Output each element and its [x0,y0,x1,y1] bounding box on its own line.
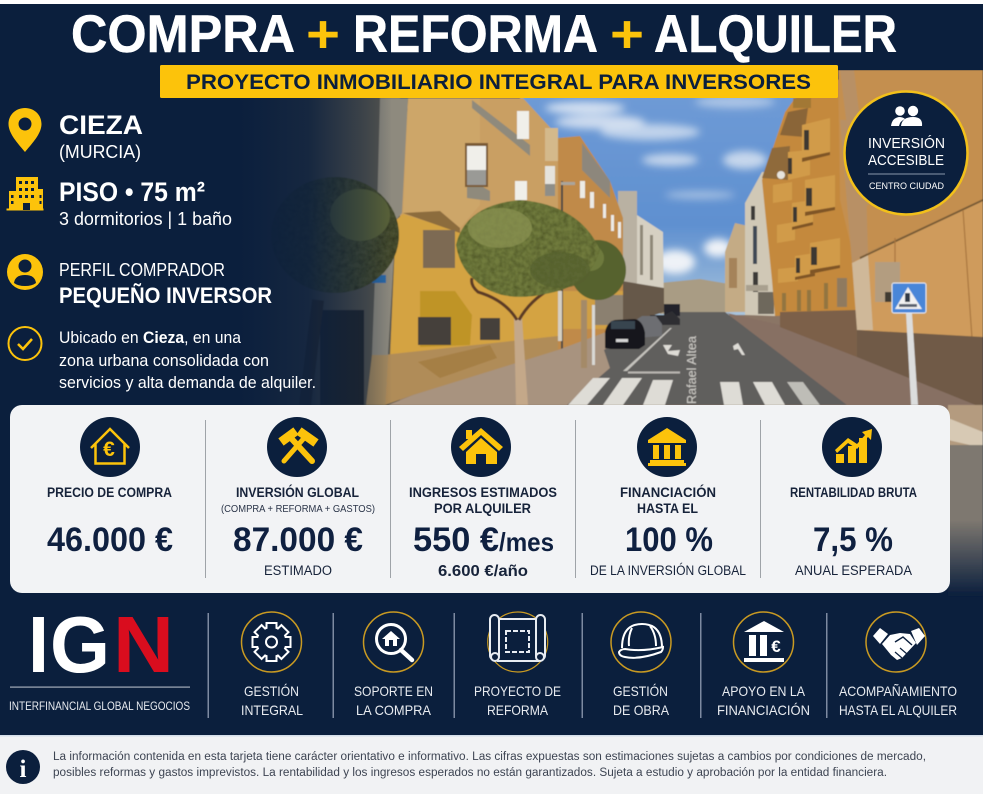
buyer profile block: PERFIL COMPRADOR [59,260,225,280]
figure: rentabilidad: 7,5 % [813,521,893,559]
photo ground backing [380,300,983,415]
location block [8,108,143,162]
photo strip right of the card [948,405,983,596]
service: apoyo en la financiación: FINANCIACIÓN [717,702,810,718]
figure: inversión global: 87.000 € [233,521,363,559]
panel: key figures [10,405,950,593]
roof slabs [780,108,808,137]
figure: financiación: HASTA EL [637,501,698,516]
services row [208,612,957,718]
location description [8,327,316,392]
icon: buildings [6,177,44,210]
windows [465,143,488,187]
crosswalk road sign [892,283,926,405]
wall base [780,310,857,357]
doorway in dim wall [320,310,364,405]
service: apoyo en la financiación [717,612,810,718]
logo: IGN [9,600,190,713]
disclaimer footer: La información contenida en esta tarjeta tiene carácter orientativo e informativo. Las cifras expuestas son estimaciones sujetas a cambios por condiciones de mercado, [53,751,926,763]
dark openings [788,130,817,273]
service: proyecto de reforma [474,612,561,718]
dark wall at far left of the photo [240,70,400,410]
left building main facade [383,98,558,405]
buyer profile block [7,254,272,308]
location block: (MURCIA) [59,142,141,162]
property block: PISO • 75 m² [59,177,205,207]
gray bands [472,100,530,156]
sky with clouds [520,90,810,315]
satellite dish [777,171,785,179]
small blue sign on pillar [372,275,386,283]
left building second section [552,136,623,358]
service: soporte en la compra: LA COMPRA [356,702,432,718]
figure: precio de compra [47,417,173,559]
figure: financiación [590,417,746,578]
figure: ingresos: 550 € [413,521,499,559]
third street tree [570,240,626,368]
figure: ingresos: INGRESOS ESTIMADOS [409,485,557,500]
icon: house with euro: € [103,438,115,461]
figure: financiación: DE LA INVERSIÓN GLOBAL [590,563,746,578]
header band [0,4,983,70]
gray pillar [370,98,408,405]
logo: IGN: I [28,600,49,689]
badge: inversión accesible: INVERSIÓN [868,135,945,152]
title: ALQUILER [654,5,897,64]
icon: handshake [873,628,925,661]
title: + [610,5,644,64]
street photo [240,70,983,596]
icon: hard hat [619,624,663,658]
figure: financiación: 100 % [625,521,713,559]
icon: growth chart [835,429,872,463]
service: proyecto de reforma: REFORMA [487,702,549,718]
property block: 3 dormitorios | 1 baño [59,209,232,229]
logo: IGN: N [113,600,174,689]
first dim street tree [271,177,399,405]
service: proyecto de reforma: PROYECTO DE [474,683,561,699]
figure: precio de compra: 46.000 € [47,521,173,559]
icon: check [8,327,42,360]
icon: map pin [8,108,42,152]
disclaimer footer: posibles reformas y gastos imprevistos. La rentabilidad y los ingresos esperados no están garantizados. Sujeta a estudio y aprobación por la entidad financiera. [53,767,887,779]
icon: magnifier with house [376,624,412,660]
icon: house [459,428,503,464]
figure: inversión global [221,417,375,578]
title: + [306,5,340,64]
service: gestión de obra: GESTIÓN [613,683,668,699]
icon: bank [648,428,686,466]
icon: blueprint [490,615,545,661]
second street tree [456,200,600,405]
badge: inversión accesible: CENTRO CIUDAD [869,181,944,192]
badge: inversión accesible [844,92,968,214]
service: gestión integral: GESTIÓN [244,683,299,699]
navy fade over the left of the photo [240,70,392,406]
figure: financiación: FINANCIACIÓN [620,485,716,500]
service: apoyo en la financiación: APOYO EN LA [722,683,806,699]
icon: info [6,750,40,784]
left navy column [0,70,241,406]
service: acompañamiento [839,612,957,718]
title [71,5,897,64]
road markings [568,328,820,405]
title: REFORMA [353,5,598,64]
icon: people [891,106,922,126]
service: acompañamiento: HASTA EL ALQUILER [839,702,957,718]
logo: IGN: INTERFINANCIAL GLOBAL NEGOCIOS [9,699,190,713]
figure: ingresos: /mes [499,527,554,557]
road [567,312,847,405]
figure: ingresos: 6.600 €/año [438,563,528,580]
distant hills [660,279,735,314]
balconies [773,118,840,283]
far left buildings [618,191,664,325]
service: gestión de obra [611,612,671,718]
figure: precio de compra: PRECIO DE COMPRA [47,485,172,500]
painted street name: Rafael Altea [684,335,699,404]
icon: info: i [20,756,27,783]
right sidewalk [727,313,983,420]
icon: house with euro [91,429,129,464]
icon: crossed hammers [281,431,316,461]
left sidewalk [388,325,625,405]
property block [6,177,232,229]
location description: Ubicado en Cieza, en una [59,329,242,347]
title: COMPRA [71,5,295,64]
figure: rentabilidad: RENTABILIDAD BRUTA [790,485,917,500]
figure: rentabilidad [790,417,917,578]
right main wall [838,70,983,408]
right distant buildings [725,172,775,316]
right balcony building [762,70,860,357]
disclaimer footer [0,735,983,794]
buyer profile block: PEQUEÑO INVERSOR [59,283,272,308]
figure: inversión global: (COMPRA + REFORMA + GASTOS) [221,504,375,515]
service: soporte en la compra: SOPORTE EN [354,683,433,699]
service: gestión integral: INTEGRAL [241,702,303,718]
subtitle banner [160,65,838,98]
ground floor windows [837,278,847,307]
location block: CIEZA [59,110,143,140]
figure: inversión global: INVERSIÓN GLOBAL [236,485,359,500]
service: acompañamiento: ACOMPAÑAMIENTO [839,683,957,699]
figure: rentabilidad: ANUAL ESPERADA [795,563,912,578]
icon: bank with euro: € [771,637,781,656]
figure: ingresos: POR ALQUILER [434,501,531,516]
top white strip [0,0,983,4]
badge: inversión accesible: ACCESIBLE [868,153,944,169]
subtitle banner: PROYECTO INMOBILIARIO INTEGRAL PARA INVERSORES [186,71,811,94]
icon: user [7,254,43,290]
logo: IGN: G [50,600,110,689]
location description: zona urbana consolidada con [59,352,269,370]
service: gestión integral [241,612,303,718]
icon: gear [254,624,290,660]
location description: servicios y alta demanda de alquiler. [59,374,316,392]
figure: inversión global: ESTIMADO [264,563,332,578]
parked cars [605,304,680,349]
figure: ingresos [409,417,557,580]
service: soporte en la compra [354,612,433,718]
service: gestión de obra: DE OBRA [613,702,670,718]
